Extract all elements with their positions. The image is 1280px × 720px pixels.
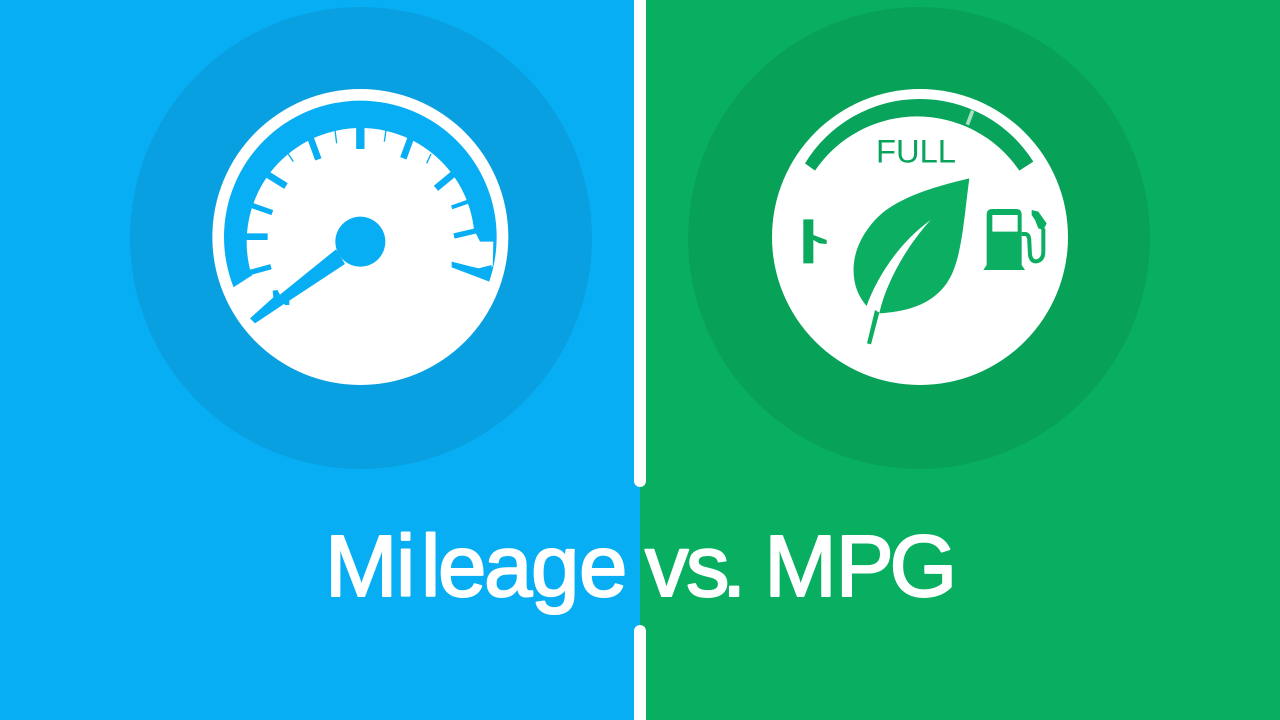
title: MPG: [764, 518, 957, 615]
panel: MPG (green): [640, 0, 1280, 720]
title: Mileage: [325, 518, 627, 615]
center divider: upper: [634, 0, 646, 487]
center divider: lower: [634, 625, 646, 720]
icon: fuel gauge: [772, 89, 1068, 385]
gauge label: FULL: FULL: [876, 134, 956, 170]
panel: mileage (blue): [130, 7, 592, 469]
title: vs.: [645, 518, 746, 615]
fuel gauge arc: [805, 99, 1033, 171]
icon: speedometer: [212, 89, 508, 385]
halo circle: mileage: [130, 7, 592, 469]
icon: leaf: [854, 178, 969, 344]
speedometer needle: [250, 217, 385, 323]
icon: fuel pump: [983, 209, 1047, 270]
gauge marker: [967, 111, 973, 125]
title: [325, 518, 957, 615]
speedometer tick marks: [245, 127, 477, 273]
empty marker: [803, 219, 827, 263]
halo circle: MPG: [688, 7, 1150, 469]
